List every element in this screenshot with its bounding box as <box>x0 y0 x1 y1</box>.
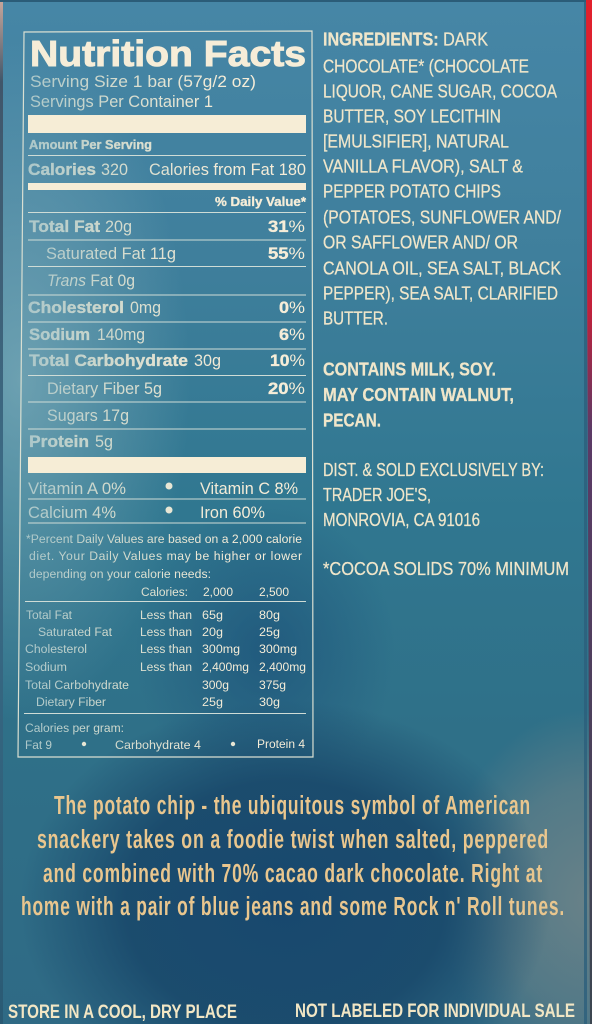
daily value reference table: 80g <box>259 608 280 622</box>
daily value reference table: Cholesterol <box>25 642 87 656</box>
daily value reference table: Less than <box>140 625 192 639</box>
text block: ingredients: PEPPER POTATO CHIPS <box>323 180 501 202</box>
daily value reference table: Sodium <box>25 660 67 674</box>
nutrient rows: Cholesterol <box>28 299 124 317</box>
daily value reference table: 25g <box>259 625 280 639</box>
daily value reference table: 2,400mg <box>259 660 306 674</box>
nutrient rows: Protein <box>29 433 89 451</box>
daily value reference table: Less than <box>140 642 192 656</box>
nutrient rows: Dietary Fiber 5g <box>47 380 162 398</box>
daily value reference table: 65g <box>202 608 223 622</box>
nutrient rows <box>28 218 305 451</box>
daily value reference table: 2,500 <box>259 585 289 599</box>
text block: allergen warning: MAY CONTAIN WALNUT, <box>323 384 514 405</box>
nutrient rows: 0mg <box>130 299 161 317</box>
nutrient rows: Trans Fat 0g <box>47 272 135 290</box>
text block: ingredients: OR SAFFLOWER AND/ OR <box>323 232 518 252</box>
calories per gram <box>25 721 305 752</box>
calories per gram: Fat 9 <box>25 738 52 752</box>
nutrient rows: 0% <box>279 299 305 317</box>
calories per gram: Carbohydrate 4 <box>115 738 201 752</box>
daily value reference table: 25g <box>202 695 223 709</box>
nutrient rows: 5g <box>95 433 113 451</box>
daily value reference table: Saturated Fat <box>38 625 113 639</box>
text block: allergen warning: CONTAINS MILK, SOY. <box>323 358 496 380</box>
daily value reference table: 300mg <box>202 642 240 656</box>
daily value footnote: diet. Your Daily Values may be higher or lower <box>29 549 302 563</box>
serving information: Servings Per Container 1 <box>30 93 213 111</box>
vitamins and minerals: Vitamin C 8% <box>200 480 298 498</box>
text block: distributor: MONROVIA, CA 91016 <box>323 509 480 530</box>
daily value reference table: Less than <box>140 608 192 622</box>
nutrient rows: 10% <box>270 352 305 370</box>
text block: ingredients: BUTTER, SOY LECITHIN <box>323 106 501 126</box>
calories section: % Daily Value* <box>215 195 306 209</box>
text block: allergen warning <box>323 358 514 430</box>
nutrient rows: Total Fat <box>29 218 101 236</box>
nutrient rows: 55% <box>268 245 305 263</box>
text block: ingredients: CANOLA OIL, SEA SALT, BLACK <box>323 258 562 278</box>
heading: nutrition facts: Nutrition Facts <box>30 33 306 74</box>
calories section: 320 <box>101 161 128 179</box>
thick divider bars <box>28 115 306 473</box>
nutrient rows: 140mg <box>97 326 145 344</box>
text block: product story <box>21 792 565 921</box>
calories section: Calories <box>28 161 96 179</box>
daily value reference table: 300g <box>202 678 229 692</box>
text block: distributor <box>323 459 544 530</box>
vitamins and minerals: Iron 60% <box>200 504 265 522</box>
vitamins and minerals: Vitamin A 0% <box>28 480 126 498</box>
text block: distributor: TRADER JOE'S, <box>323 484 431 505</box>
serving information <box>30 73 256 111</box>
text block: ingredients: [EMULSIFIER], NATURAL <box>323 130 509 152</box>
daily value footnote: *Percent Daily Values are based on a 2,000 calorie <box>26 532 302 546</box>
nutrient rows: 6% <box>279 326 305 344</box>
nutrient rows: 20g <box>105 218 132 236</box>
daily value reference table: Less than <box>140 660 192 674</box>
vitamins and minerals: Calcium 4% <box>28 504 116 522</box>
text block: ingredients: BUTTER. <box>323 308 388 328</box>
text block: ingredients: INGREDIENTS: DARK <box>323 28 489 50</box>
daily value reference table: 300mg <box>259 642 297 656</box>
daily value footnote <box>26 532 302 581</box>
daily value reference table: Calories: <box>141 585 188 599</box>
daily value reference table: Total Carbohydrate <box>25 678 129 692</box>
daily value reference table: Dietary Fiber <box>36 695 106 709</box>
daily value reference table: Total Fat <box>26 608 73 622</box>
text block: allergen warning: PECAN. <box>323 410 381 430</box>
calories per gram: Protein 4 <box>257 737 305 751</box>
nutrient rows: Sodium <box>29 326 90 344</box>
daily value reference table: 20g <box>202 625 223 639</box>
nutrient rows: Total Carbohydrate <box>29 352 188 370</box>
calories section: Calories from Fat 180 <box>149 161 306 179</box>
calories section: Amount Per Serving <box>29 138 152 152</box>
nutrient rows: 30g <box>194 352 221 370</box>
serving information: Serving Size 1 bar (57g/2 oz) <box>30 73 256 91</box>
text block: ingredients <box>323 28 562 328</box>
text block: ingredients: VANILLA FLAVOR), SALT & <box>323 156 524 176</box>
nutrient rows: Saturated Fat 11g <box>46 245 176 263</box>
nutrient rows: 20% <box>268 380 305 398</box>
panel: nutrition facts label <box>18 31 313 757</box>
daily value reference table: 375g <box>259 678 286 692</box>
daily value reference table <box>24 585 306 714</box>
daily value footnote: depending on your calorie needs: <box>29 567 211 581</box>
text block: ingredients: CHOCOLATE* (CHOCOLATE <box>323 56 529 76</box>
vitamins and minerals <box>28 480 298 522</box>
daily value reference table: 2,400mg <box>202 660 249 674</box>
nutrient rows: Sugars 17g <box>47 407 129 425</box>
calories per gram: Calories per gram: <box>25 721 124 735</box>
daily value reference table: 2,000 <box>203 585 233 599</box>
nutrient rows: 31% <box>268 218 305 236</box>
footer: storage note: STORE IN A COOL, DRY PLACE <box>8 1002 237 1023</box>
daily value reference table: 30g <box>259 695 280 709</box>
calories section <box>28 138 306 209</box>
